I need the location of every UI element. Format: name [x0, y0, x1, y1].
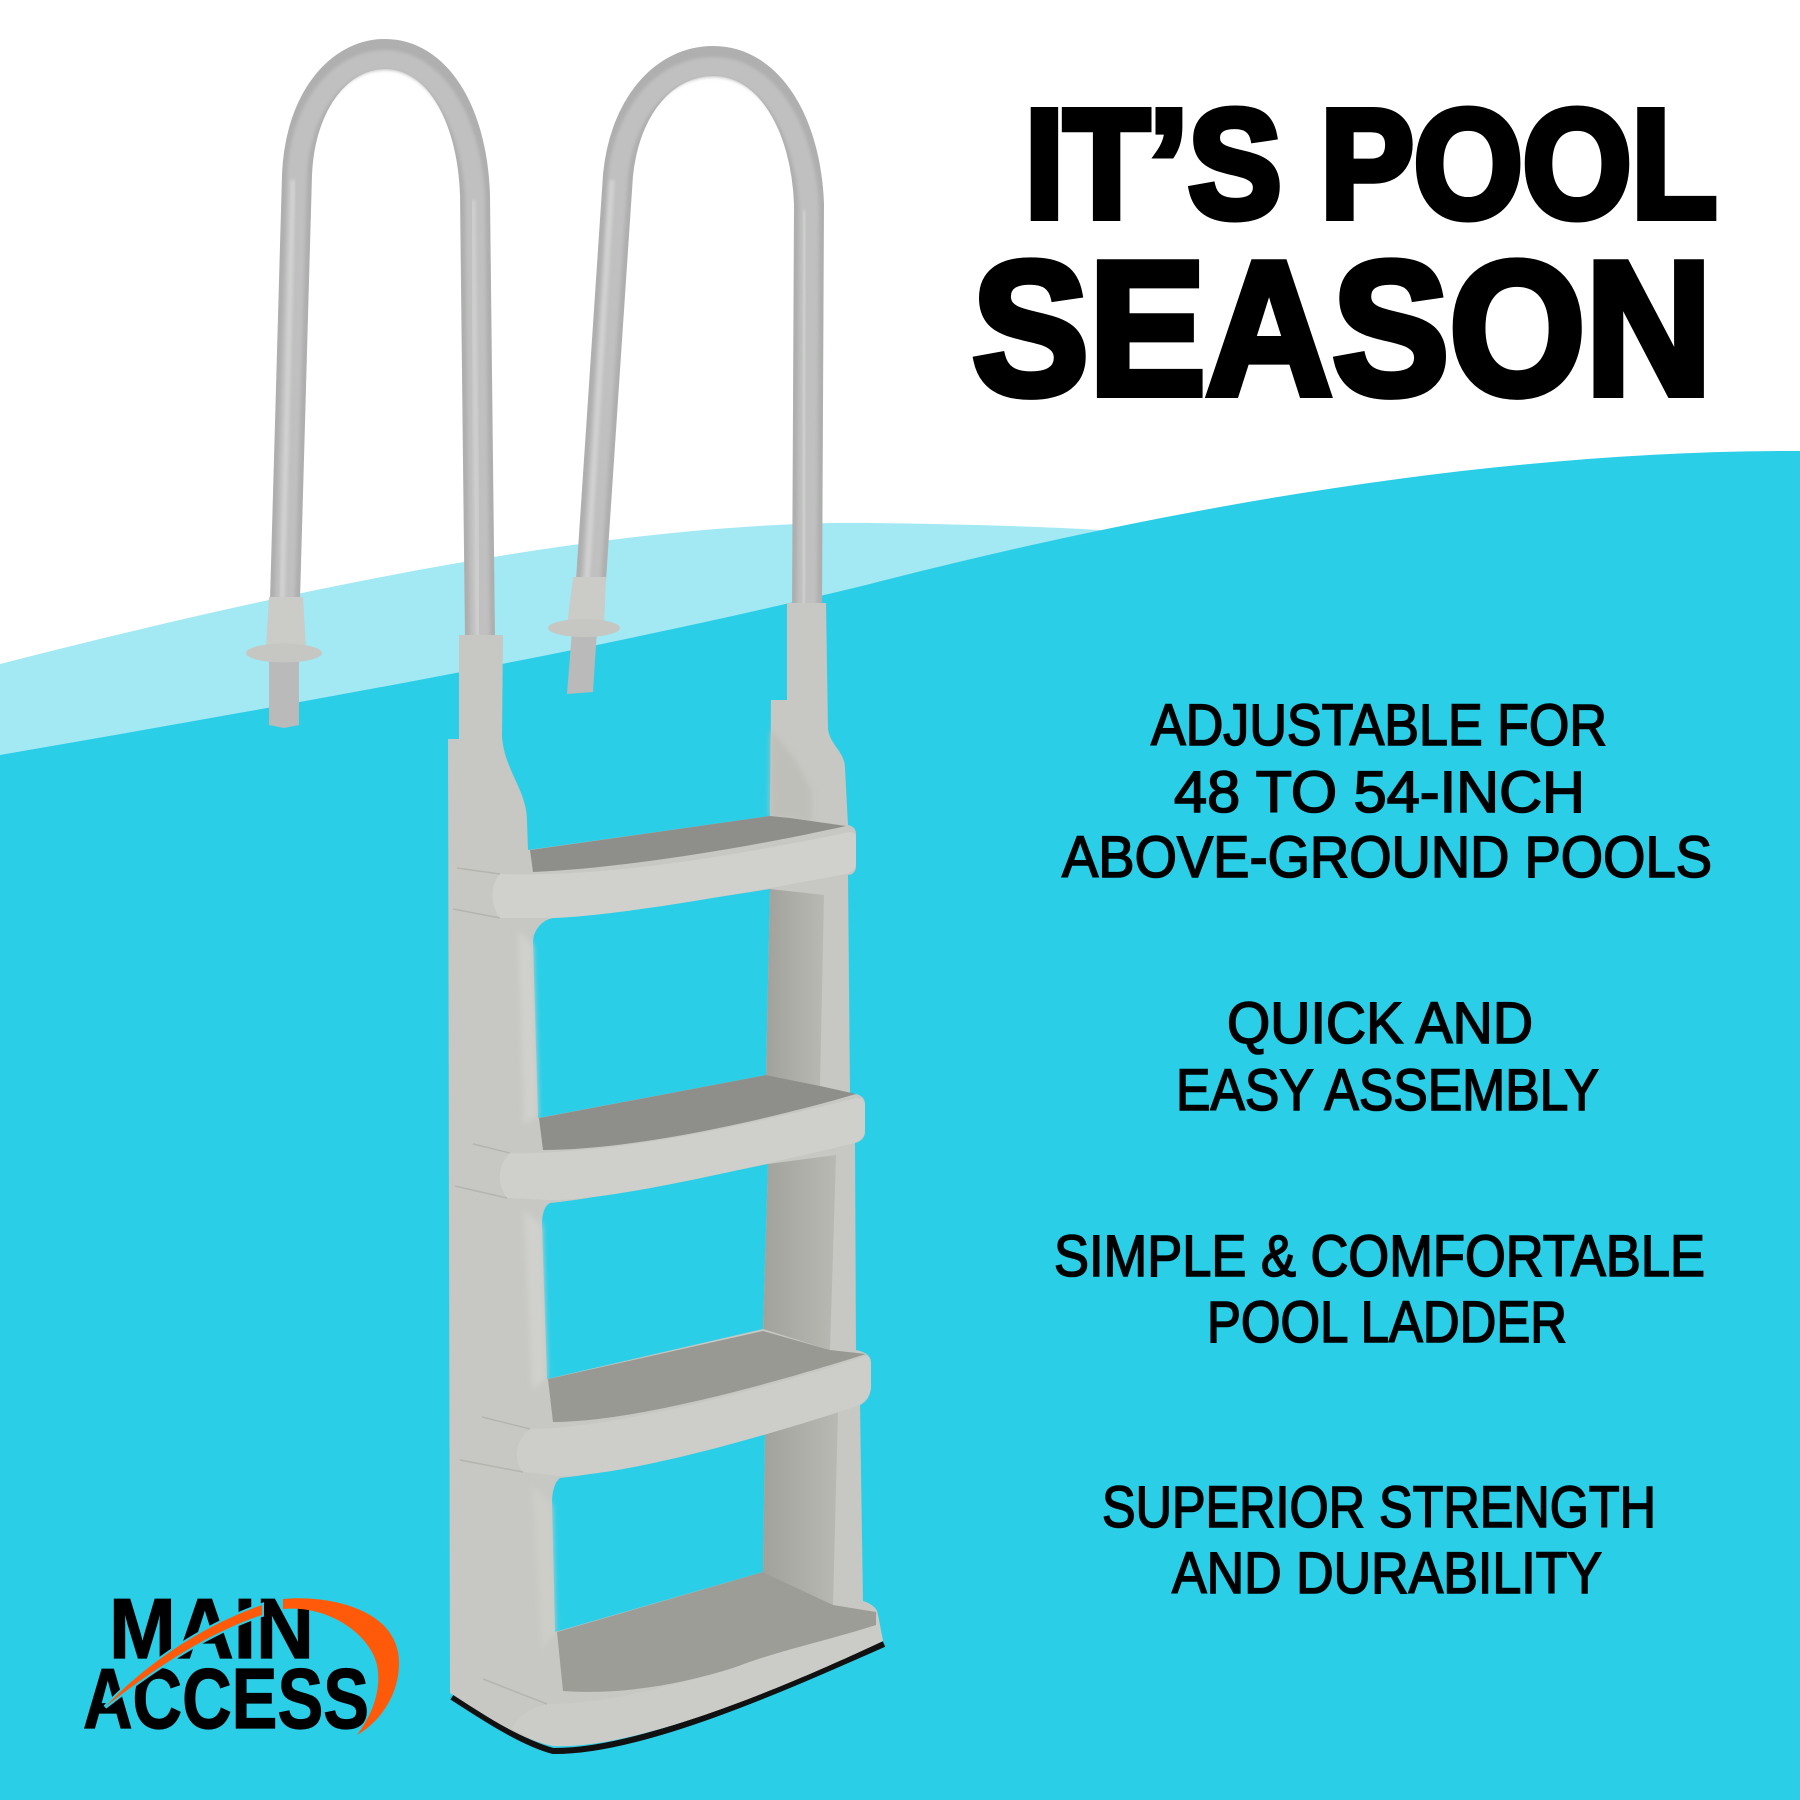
- ladder body: [448, 603, 883, 1746]
- tread 1: [453, 816, 856, 918]
- feature: adjustable: ABOVE-GROUND POOLS: [1062, 825, 1712, 890]
- feature: adjustable: [1062, 693, 1712, 890]
- right handrail: [548, 61, 809, 694]
- heading: IT’S POOL: [1025, 78, 1717, 250]
- logo: Main Access: ACCESS: [83, 1652, 369, 1747]
- ladder base shadow: [452, 1644, 884, 1751]
- tread 4: [483, 1572, 883, 1746]
- feature: strength: AND DURABILITY: [1172, 1541, 1602, 1606]
- feature: assembly: [1176, 991, 1599, 1123]
- feature: assembly: EASY ASSEMBLY: [1176, 1058, 1599, 1123]
- heading: SEASON: [972, 223, 1712, 435]
- feature: adjustable: 48 TO 54-INCH: [1174, 760, 1585, 825]
- feature: comfort: [1054, 1224, 1705, 1355]
- feature: comfort: SIMPLE & COMFORTABLE: [1054, 1224, 1705, 1289]
- right post shading: [763, 730, 838, 1605]
- left post highlights: [518, 930, 555, 1650]
- tread 2: [455, 1075, 865, 1200]
- heading: [972, 78, 1717, 435]
- feature: comfort: POOL LADDER: [1207, 1290, 1567, 1355]
- logo: Main Access: MAIN: [109, 1582, 314, 1677]
- pool ladder: [246, 54, 884, 1751]
- main water wave: [0, 451, 1800, 1800]
- feature: assembly: QUICK AND: [1227, 991, 1533, 1056]
- feature: strength: SUPERIOR STRENGTH: [1102, 1475, 1656, 1540]
- left handrail: [246, 54, 480, 728]
- feature: strength: [1102, 1475, 1656, 1606]
- tread 3: [460, 1331, 871, 1476]
- light water wave: [0, 523, 1100, 800]
- logo: Main Access: [83, 1582, 399, 1747]
- feature: adjustable: ADJUSTABLE FOR: [1151, 693, 1607, 758]
